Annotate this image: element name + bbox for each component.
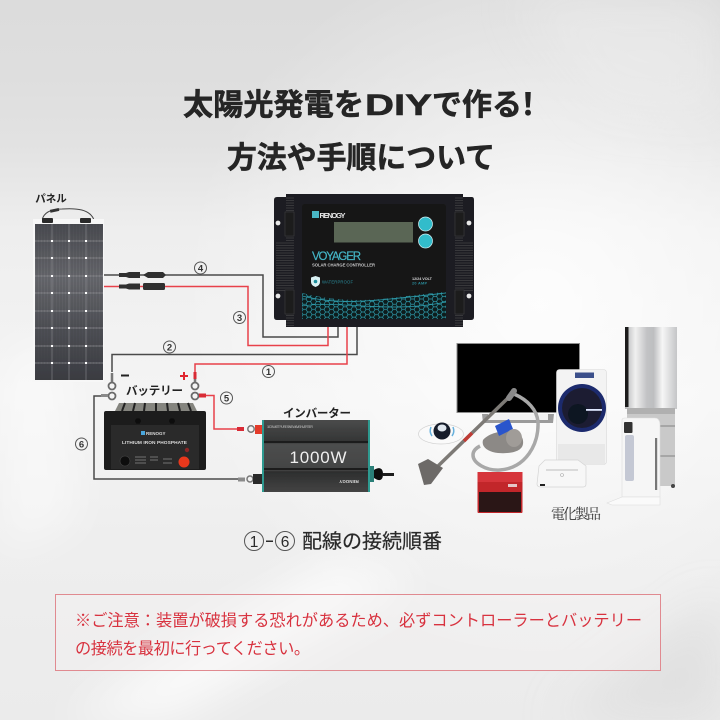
battery brand bbox=[141, 431, 145, 435]
wire numbers: 5 bbox=[224, 394, 230, 404]
caption circled range: 1 bbox=[250, 534, 258, 551]
wire 6 black bbox=[94, 396, 240, 479]
appliances group bbox=[418, 327, 677, 513]
title: 太陽光発電を bbox=[183, 89, 364, 122]
wire 5 red bbox=[204, 396, 242, 429]
battery bbox=[104, 403, 206, 470]
MC4 connectors bbox=[119, 272, 166, 290]
wire 2 black bbox=[112, 325, 357, 372]
warning text: の接続を最初に行ってください。 bbox=[75, 640, 310, 658]
wire numbers bbox=[76, 262, 274, 450]
inverter left terminals bbox=[237, 425, 262, 484]
fridge bbox=[625, 327, 677, 488]
washing machine bbox=[556, 370, 606, 464]
canister vacuum bbox=[418, 391, 538, 485]
hexagon wave graphic bbox=[302, 290, 446, 320]
wire numbers: 6 bbox=[79, 440, 84, 450]
battery: RENOGY bbox=[146, 431, 166, 436]
controller model text: SOLAR CHARGE CONTROLLER bbox=[312, 262, 375, 268]
controller face bbox=[302, 204, 446, 319]
caption bbox=[244, 530, 442, 553]
title: DIY bbox=[365, 89, 432, 122]
battery model: LITHIUM IRON PHOSPHATE bbox=[122, 440, 188, 446]
waterproof badge bbox=[311, 276, 353, 287]
voltage text bbox=[412, 277, 433, 286]
plus sign bbox=[180, 372, 188, 380]
wire 4 black bbox=[104, 275, 338, 337]
controller model text bbox=[312, 251, 375, 268]
wire numbers: 3 bbox=[237, 313, 242, 324]
voltage text: 20 AMP bbox=[412, 282, 427, 286]
inverter: 1000 WATT PURE SINE WAVE INVERTER bbox=[267, 425, 313, 429]
title: 方法や手順について bbox=[227, 142, 495, 175]
TV bbox=[457, 344, 580, 423]
inverter bbox=[237, 420, 394, 492]
wire numbers: 1 bbox=[266, 367, 272, 378]
title: ！ bbox=[513, 89, 543, 122]
controller housing bbox=[274, 194, 474, 327]
solar panel bbox=[33, 208, 104, 382]
terminal connectors red bbox=[194, 372, 206, 398]
wire numbers: 4 bbox=[198, 264, 204, 274]
warning text: ※ご注意：装置が破損する恐れがあるため、必ずコントローラーとバッテリー bbox=[75, 612, 642, 630]
waterproof badge: WATERPROOF bbox=[322, 280, 353, 284]
wire numbers: 2 bbox=[167, 342, 172, 354]
warning box bbox=[56, 594, 660, 670]
charge controller bbox=[274, 194, 474, 327]
caption text: 配線の接続順番 bbox=[302, 530, 442, 553]
minus sign bbox=[121, 374, 129, 376]
robot vacuum bbox=[418, 422, 464, 444]
inverter plug bbox=[370, 466, 394, 482]
inverter brand flipped: RENOGY bbox=[339, 479, 359, 484]
battery heat sink bbox=[115, 403, 197, 411]
inverter label: インバーター bbox=[283, 407, 351, 420]
warning text bbox=[75, 612, 642, 658]
controller model text: VOYAGER bbox=[312, 251, 361, 263]
battery label: バッテリー bbox=[126, 384, 183, 398]
inverter wattage: 1000W bbox=[290, 448, 346, 467]
battery body bbox=[104, 411, 206, 470]
battery terminals bbox=[101, 373, 198, 400]
controller buttons bbox=[418, 217, 432, 248]
panel top cable bbox=[42, 209, 94, 220]
voltage text: 12/24 VOLT bbox=[412, 277, 433, 281]
controller logo: RENOGY bbox=[320, 211, 346, 220]
microwave bbox=[478, 472, 522, 513]
caption circled range bbox=[244, 532, 294, 551]
controller LCD bbox=[334, 222, 413, 242]
printer bbox=[537, 460, 586, 487]
caption circled range: 6 bbox=[281, 534, 289, 551]
title: で作る bbox=[432, 89, 522, 122]
appliances label: 電化製品 bbox=[551, 506, 601, 523]
wire 3 red bbox=[104, 286, 328, 346]
inverter body bbox=[262, 420, 370, 492]
air purifier bbox=[607, 418, 660, 505]
title bbox=[183, 89, 543, 175]
wire 1 red bbox=[195, 325, 347, 372]
panel label: パネル bbox=[35, 193, 67, 205]
